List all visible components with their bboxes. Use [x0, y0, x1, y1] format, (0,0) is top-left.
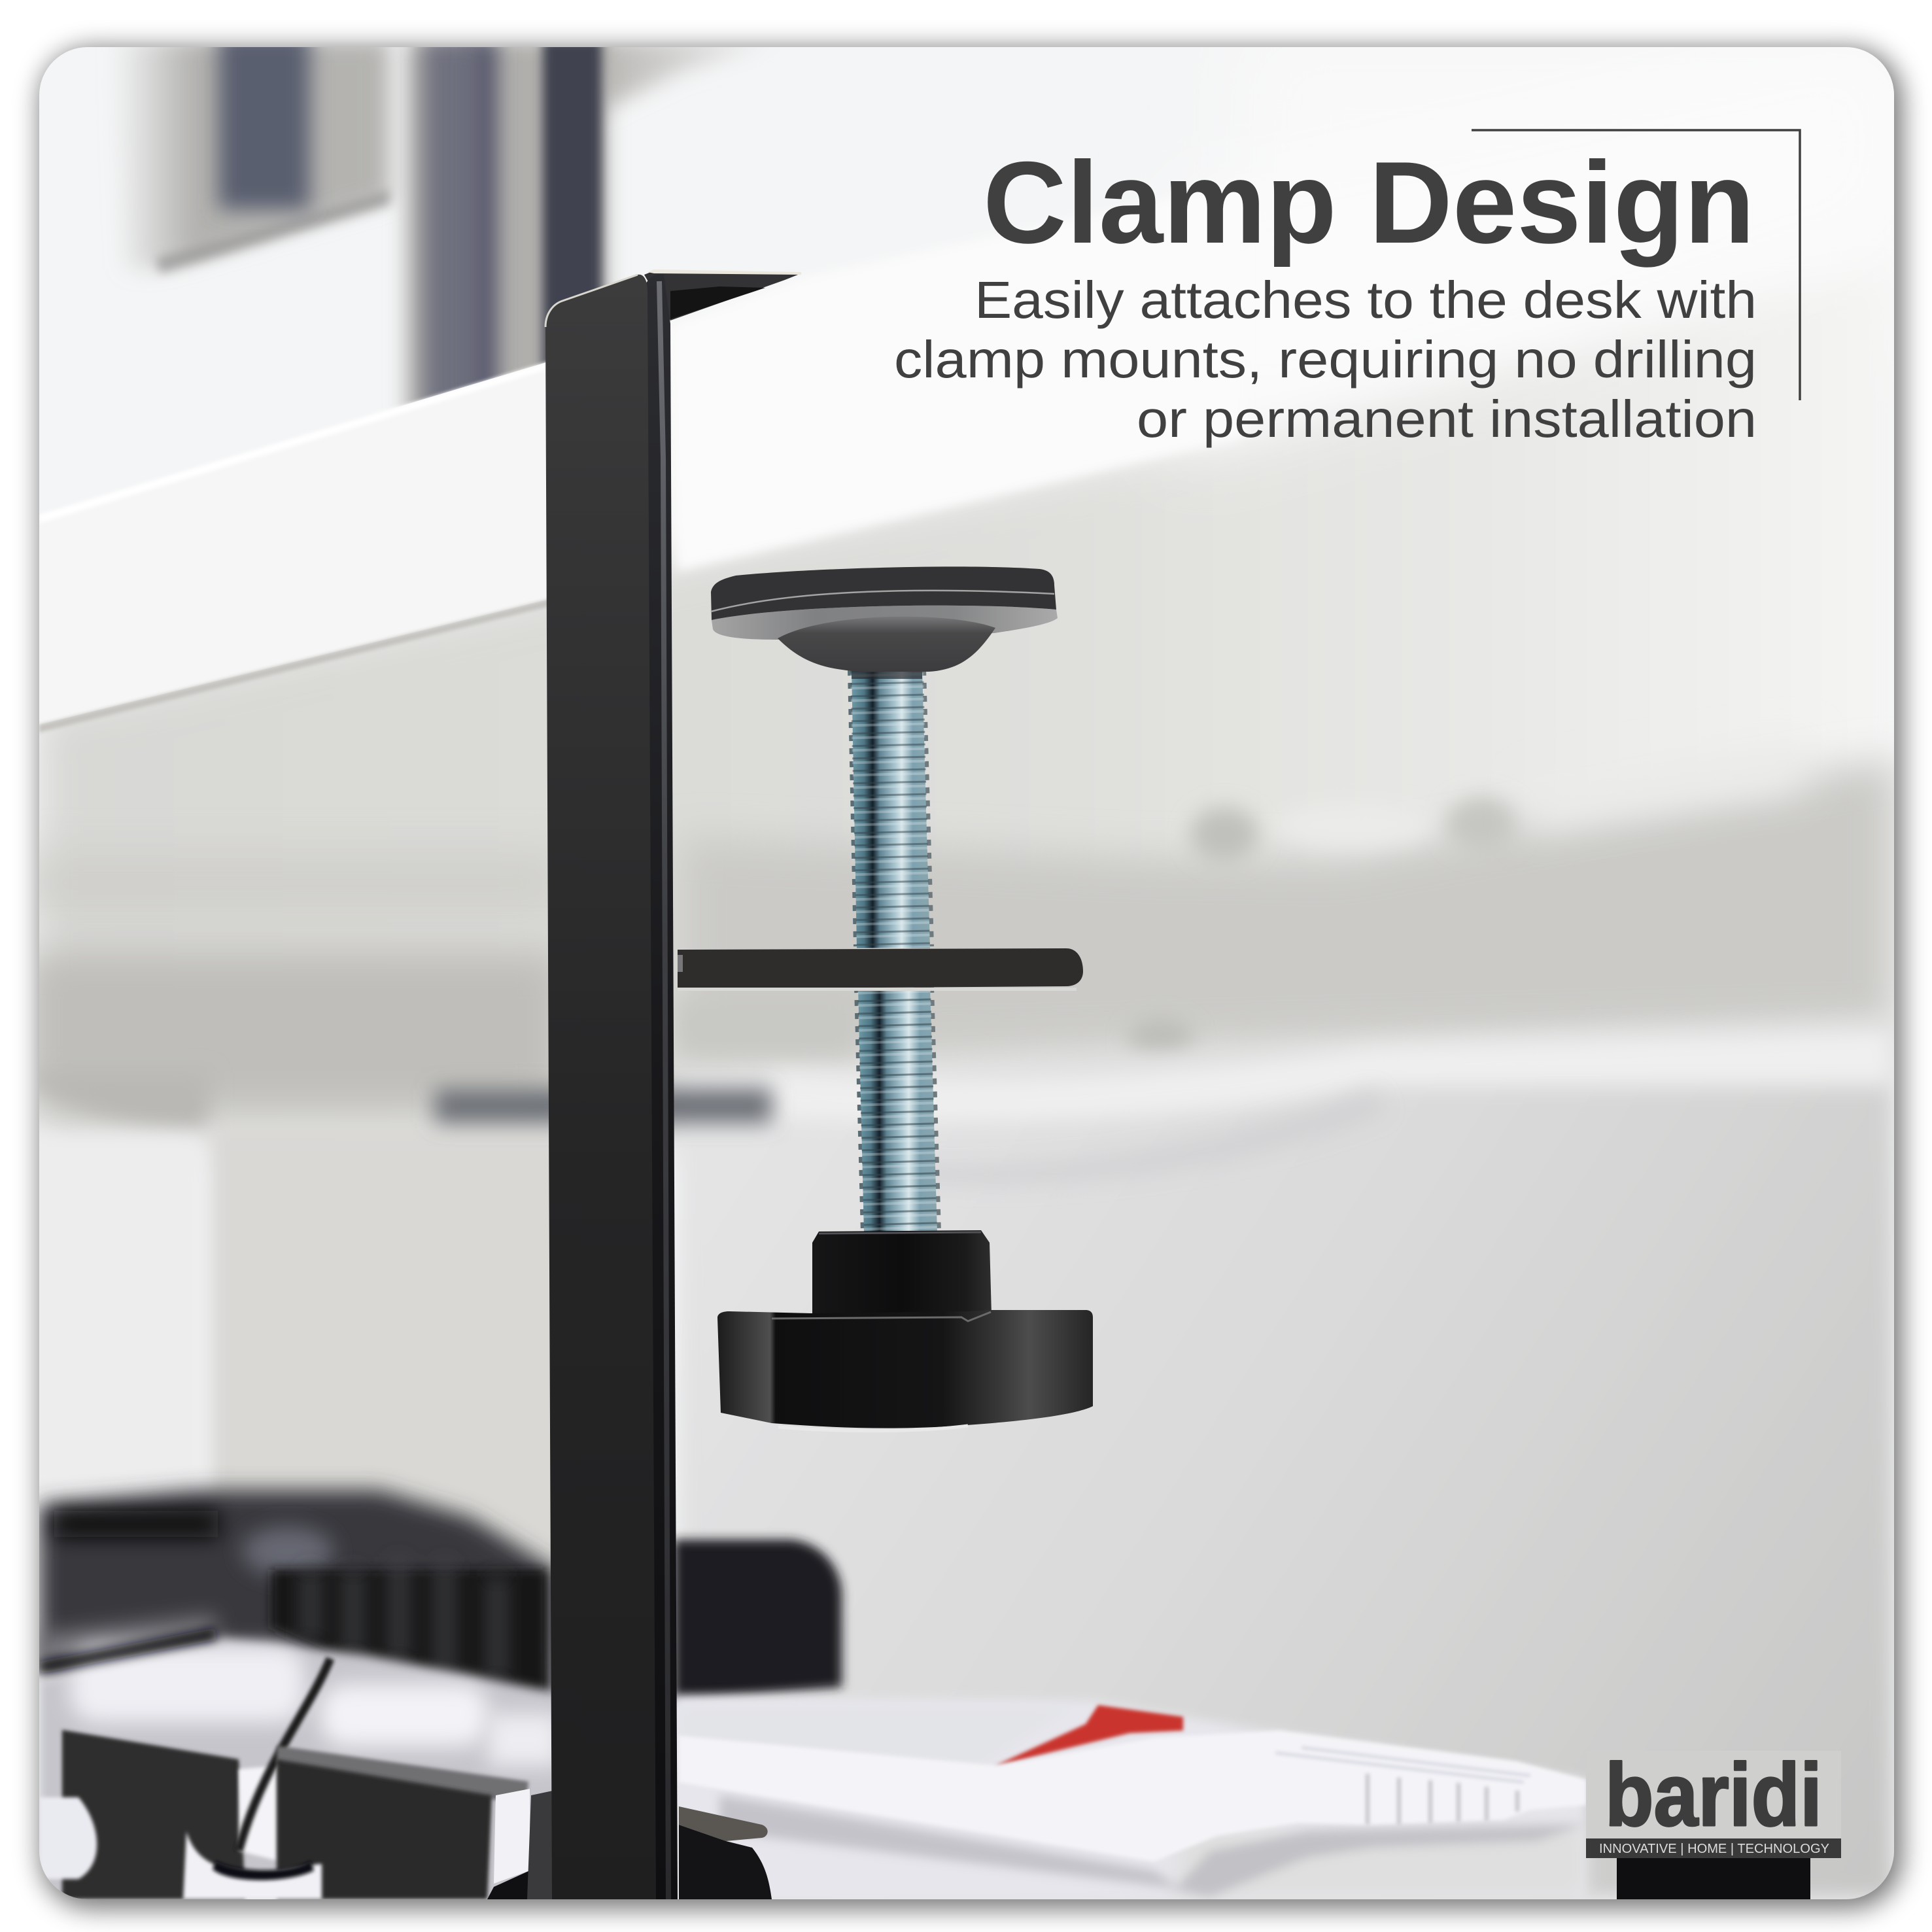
shadow under plug	[719, 1795, 1586, 1897]
heading: Clamp Design	[983, 137, 1755, 267]
clamp support plate	[678, 948, 1083, 991]
description text: Easily attaches to the desk with	[975, 271, 1757, 329]
threaded bolt upper	[851, 667, 931, 948]
white plug body	[679, 1731, 1586, 1861]
window frame	[111, 39, 390, 269]
description text	[894, 271, 1757, 448]
title bracket line	[1472, 130, 1800, 400]
description text: clamp mounts, requiring no drilling	[894, 330, 1757, 388]
clamp side face	[644, 275, 678, 1899]
cables and power brick	[39, 1490, 556, 1727]
thin cable	[239, 1659, 330, 1851]
dark streak under desk	[435, 1089, 772, 1123]
description text: or permanent installation	[1137, 390, 1757, 448]
light arc band	[772, 1027, 1894, 1122]
black star knob	[717, 1230, 1093, 1431]
dome speaker	[674, 1540, 842, 1700]
clamp front face	[545, 275, 656, 1899]
dark column	[407, 39, 606, 425]
rubber clamp pad	[711, 566, 1058, 672]
white paper and lower power strip	[674, 1696, 1586, 1899]
plug fins	[1368, 1774, 1517, 1825]
desk clamp frame	[545, 269, 801, 1899]
right underside shadow band	[680, 759, 1897, 1060]
threaded bolt lower	[857, 987, 938, 1233]
black block under logo	[1617, 1844, 1810, 1903]
logo: baridi: INNOVATIVE | HOME | TECHNOLOGY	[1599, 1842, 1829, 1856]
desk top edge	[39, 39, 1894, 733]
clamp top arm	[644, 271, 801, 320]
lower wall	[678, 1020, 1894, 1899]
left underside bands	[26, 850, 562, 916]
red label	[995, 1705, 1183, 1766]
logo: baridi: baridi	[1605, 1745, 1822, 1844]
blurred desk items	[39, 1490, 1810, 1903]
keyboard keys	[39, 1638, 562, 1899]
black cable management clips	[39, 1659, 772, 1899]
